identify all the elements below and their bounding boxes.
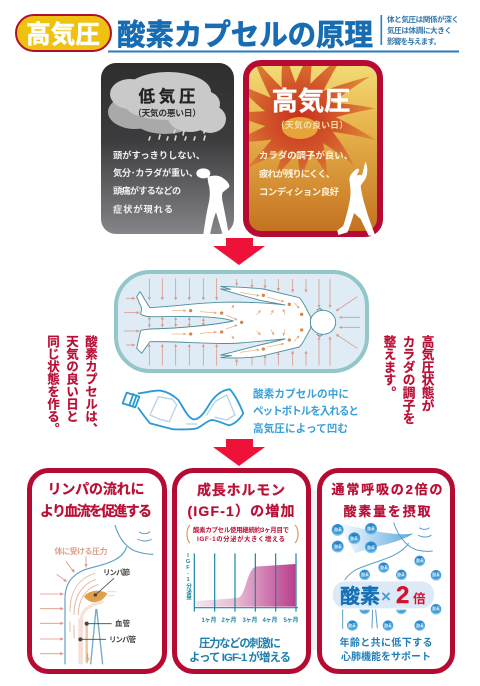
chart y-axis label: IGF-1分泌量: [185, 553, 192, 600]
panel: high pressure: [243, 60, 383, 237]
hormone caption: [189, 636, 291, 664]
low pressure symptoms: 頭がすっきりしない、: [113, 150, 205, 160]
header: [16, 14, 459, 52]
hormone heading: (IGF-1）の増加: [188, 503, 294, 519]
pressure arrows: [124, 278, 360, 366]
hormone heading: 成長ホルモン: [197, 482, 285, 498]
left vertical text: 天気の良い日と: [64, 335, 78, 422]
bottle caption: 高気圧によって凹む: [253, 422, 348, 435]
molecule labels: [334, 526, 440, 628]
lymph heading: [40, 481, 152, 519]
chart month labels: 4ヶ月: [262, 617, 278, 624]
icon: stretching person: [337, 162, 375, 236]
hormone caption: よって IGF-1 が増える: [189, 650, 291, 664]
high pressure benefits: [259, 150, 353, 197]
molecule labels: 酸素: [380, 565, 388, 570]
oxygen caption: 心肺機能をサポート: [341, 650, 431, 663]
internal flow arrows: [172, 292, 299, 352]
chart month labels: 3ヶ月: [242, 617, 258, 624]
right vertical text: 整えます。: [382, 334, 396, 399]
lymph labels: リンパ節: [103, 568, 131, 577]
header note: 影響を与えます。: [387, 36, 441, 46]
lymph heading: より血流を促進する: [40, 503, 152, 519]
oxygen caption: 年齢と共に低下する: [340, 636, 432, 649]
right vertical text: カラダの調子を: [400, 335, 416, 425]
arrow: down to capsule: [213, 238, 265, 265]
hormone note: 酸素カプセル使用継続約3ヶ月目で: [193, 525, 289, 534]
left vertical text: [45, 334, 97, 435]
molecule labels: 酸素: [432, 606, 440, 611]
title: 酸素カプセルの原理: [117, 19, 373, 52]
molecule labels: 酸素: [416, 623, 424, 628]
oxygen diagram: [332, 522, 441, 631]
arrow: down to effects: [213, 439, 265, 466]
body pressure label: 体に受ける圧力: [54, 546, 108, 556]
icon: rain cloud: [108, 72, 226, 140]
chart month labels: 1ヶ月: [202, 617, 216, 624]
molecule labels: 酸素: [361, 572, 369, 577]
bottle caption: 酸素カプセルの中に: [253, 388, 349, 400]
panel: growth hormone: [174, 470, 308, 672]
high pressure subtitle: （天気の良い日）: [276, 119, 348, 130]
molecule labels: 酸素: [397, 572, 405, 577]
low pressure symptoms: [113, 150, 205, 214]
oxygen times two: ×: [381, 587, 391, 606]
oxygen molecules: [332, 523, 441, 631]
lymph labels: リンパ管: [109, 635, 137, 644]
header rule: [108, 50, 459, 52]
panel: lymph flow: [30, 470, 164, 672]
low pressure symptoms: 頭痛がするなどの: [113, 185, 181, 196]
oxygen times two: [340, 582, 426, 609]
high pressure heading: 高気圧: [272, 86, 350, 116]
lymph heading: リンパの流れに: [48, 481, 144, 497]
header note: [380, 14, 459, 46]
hormone note: [187, 525, 298, 543]
badge: high pressure: 高気圧: [26, 21, 100, 49]
molecule labels: 酸素: [334, 527, 342, 532]
molecule labels: 酸素: [384, 623, 392, 628]
chart month labels: 5ヶ月: [284, 617, 298, 624]
hormone heading: [188, 482, 294, 519]
high pressure benefits: カラダの調子が良い、: [259, 150, 353, 160]
right vertical text: [382, 334, 434, 425]
molecule labels: 酸素: [350, 536, 358, 541]
oxygen times two: 2: [396, 582, 409, 609]
oxygen heading: [332, 482, 442, 519]
lymph labels: [103, 568, 137, 644]
hormone note: IGF-1の分泌が大きく増える: [197, 534, 285, 543]
molecule labels: 酸素: [361, 606, 369, 611]
low pressure subtitle: （天気の悪い日）: [133, 107, 201, 118]
bottle caption: [253, 388, 359, 435]
molecule labels: 酸素: [334, 544, 342, 549]
low pressure symptoms: 気分･カラダが重い、: [113, 167, 198, 178]
molecule labels: 酸素: [432, 572, 440, 577]
badge: high pressure: [16, 15, 111, 51]
molecule labels: 酸素: [416, 558, 424, 563]
lymph node dots: [189, 294, 303, 351]
human body outline: [137, 286, 336, 358]
oxygen times two: 倍: [413, 591, 426, 606]
pale glow between lower panels: [164, 490, 320, 650]
oxygen heading: 酸素量を摂取: [344, 504, 430, 519]
panel: low pressure: [101, 63, 234, 234]
left vertical text: 酸素カプセルは、: [83, 334, 97, 435]
panel: oxygen intake: [320, 470, 452, 672]
capsule diagram: [116, 272, 367, 371]
oxygen heading: 通常呼吸の2倍の: [332, 482, 442, 497]
header note: 体と気圧は関係が深く: [387, 14, 459, 24]
oxygen times two: 酸素: [340, 585, 380, 608]
hormone caption: 圧力などの刺激に: [199, 636, 281, 650]
right vertical text: 高気圧状態が: [420, 334, 434, 412]
lymph labels: 血管: [115, 619, 131, 628]
chart month labels: 2ヶ月: [222, 617, 236, 624]
molecule labels: 酸素: [367, 526, 375, 531]
oxygen caption: [340, 636, 432, 663]
icon: hunched person: [196, 168, 229, 234]
high pressure benefits: コンディション良好: [259, 186, 340, 197]
chart month labels: [202, 617, 298, 624]
molecule labels: 酸素: [348, 623, 356, 628]
capsule shell: [116, 272, 367, 371]
bottle caption: ペットボトルを入れると: [253, 406, 359, 418]
molecule labels: 酸素: [397, 606, 405, 611]
line-area chart: [185, 553, 298, 624]
lymph diagram: [40, 525, 153, 664]
low pressure heading: 低気圧: [138, 87, 196, 106]
molecule labels: 酸素: [367, 545, 375, 550]
icon: sun: [249, 66, 376, 177]
left vertical text: 同じ状態を作る。: [45, 335, 59, 435]
header note: 気圧は体調に大きく: [387, 25, 452, 35]
high pressure benefits: 疲れが残りにくく、: [259, 168, 335, 179]
low pressure symptoms: 症状が現れる: [113, 204, 173, 214]
icon: crushed bottle: [123, 389, 243, 429]
